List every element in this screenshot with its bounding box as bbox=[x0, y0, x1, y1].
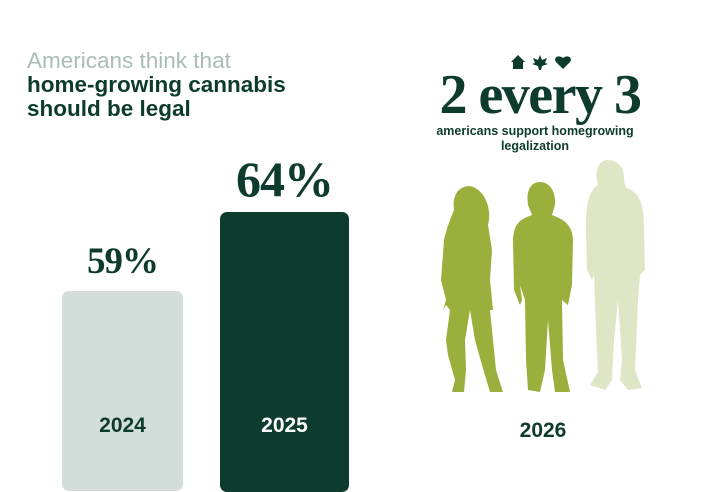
title: home-growing cannabis bbox=[27, 72, 286, 97]
middle man bbox=[513, 182, 573, 392]
year 2025: 2025 bbox=[261, 414, 308, 437]
value 59%: 59% bbox=[87, 241, 158, 282]
year 2026: 2026 bbox=[520, 419, 566, 442]
right man bbox=[586, 160, 645, 390]
title bbox=[27, 48, 286, 121]
year 2024: 2024 bbox=[99, 414, 146, 437]
bar 2025 bbox=[220, 212, 349, 492]
value 64%: 64% bbox=[236, 151, 333, 207]
subtitle bbox=[436, 124, 634, 153]
headline 2 every 3: 2 every 3 bbox=[439, 64, 641, 126]
people silhouettes bbox=[441, 160, 645, 392]
subtitle: legalization bbox=[501, 139, 569, 153]
woman bbox=[441, 186, 503, 392]
title: should be legal bbox=[27, 96, 191, 121]
icons: home leaf heart bbox=[511, 55, 571, 70]
bar 2024 bbox=[62, 291, 183, 491]
subtitle: americans support homegrowing bbox=[436, 124, 634, 138]
title: Americans think that bbox=[27, 48, 231, 73]
